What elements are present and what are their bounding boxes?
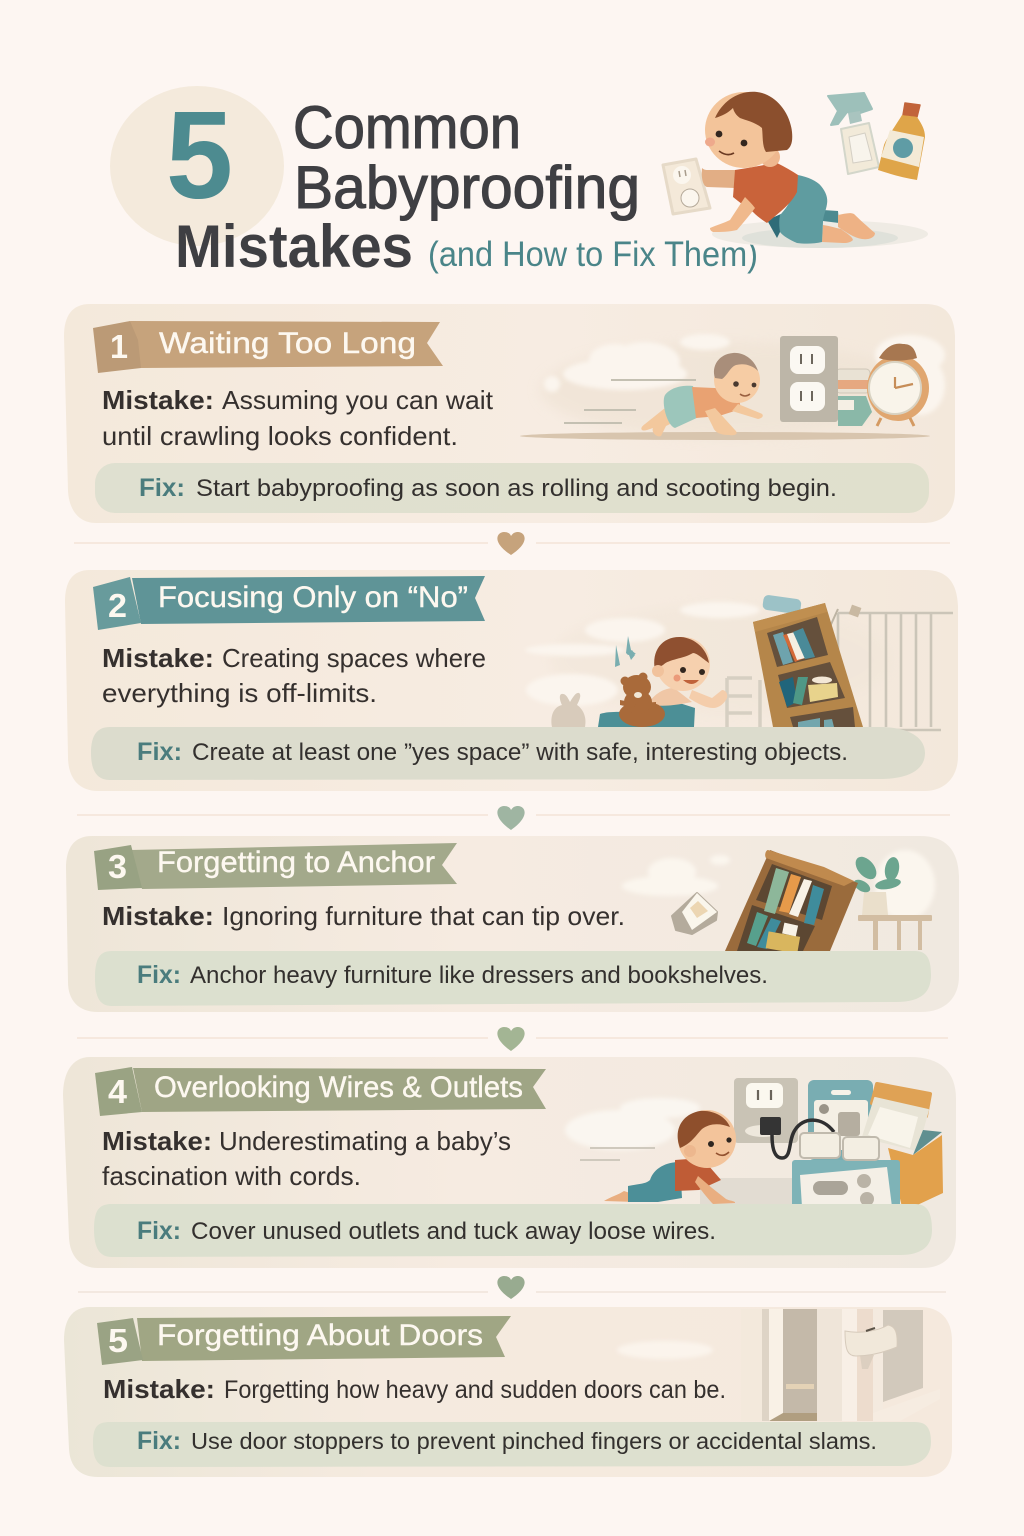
heading ribbon: 5 — [108, 1322, 128, 1359]
icon: wall outlet — [780, 336, 838, 422]
icon: plug with cord — [760, 1117, 834, 1158]
mistake text: Forgetting how heavy and sudden doors can be. — [224, 1376, 726, 1404]
icon: crawling baby — [604, 1110, 736, 1204]
fix bar: Fix: — [137, 1217, 181, 1245]
mistake text: Underestimating a baby’s — [219, 1126, 511, 1156]
title line: Mistakes: Mistakes — [175, 213, 413, 280]
heading ribbon — [93, 321, 443, 373]
icon: ladder rail — [727, 678, 760, 727]
icon: safety gate — [838, 613, 953, 730]
fix bar — [91, 727, 925, 780]
icon: spray bottle — [828, 93, 879, 174]
title line: Babyproofing: Babyproofing — [294, 154, 640, 221]
icon: baby — [598, 637, 727, 727]
header — [110, 86, 928, 280]
panel background — [64, 304, 955, 523]
fix bar: Anchor heavy furniture like dressers and bookshelves. — [190, 962, 768, 989]
icon: alarm clock — [867, 344, 929, 426]
panel 4 — [63, 1057, 956, 1268]
fix bar: Fix: — [139, 474, 185, 502]
fix bar: Use door stoppers to prevent pinched fingers or accidental slams. — [191, 1428, 877, 1454]
icon: orange bottle — [878, 103, 925, 180]
heading ribbon — [95, 1067, 546, 1116]
number tab — [97, 1318, 143, 1365]
icon: teddy bear — [619, 672, 665, 727]
fix bar: Create at least one ”yes space” with safe, interesting objects. — [192, 739, 848, 766]
illustration: baby, teddy, tipping bookshelf and gate — [525, 594, 953, 730]
icon: books — [836, 369, 872, 426]
mistake text: Ignoring furniture that can tip over. — [222, 901, 625, 931]
subtitle: (and How to Fix Them) — [428, 235, 758, 274]
mistake text — [102, 643, 486, 708]
icon: table — [858, 915, 932, 950]
heading text: Waiting Too Long — [159, 327, 416, 360]
icon: back cards — [808, 1080, 930, 1160]
divider with heart 1 — [74, 532, 950, 555]
heading ribbon — [93, 576, 485, 630]
mistake text: until crawling looks confident. — [102, 421, 458, 451]
icon: small covers — [800, 1133, 879, 1160]
mistake text: Creating spaces where — [222, 643, 486, 673]
heading ribbon: 3 — [108, 848, 127, 885]
mistake text — [102, 1126, 511, 1191]
icon: window pane — [883, 1310, 923, 1402]
icon: wall outlet — [734, 1078, 798, 1143]
panel background — [64, 1307, 952, 1477]
heading ribbon — [94, 843, 457, 890]
big number 5: 5 — [166, 87, 233, 225]
panel 2 — [65, 570, 958, 791]
panel 3 — [66, 836, 959, 1012]
fix bar — [94, 1204, 932, 1257]
fix bar: Start babyproofing as soon as rolling and scooting begin. — [196, 475, 837, 502]
heading ribbon: 4 — [108, 1073, 128, 1110]
fix bar: Fix: — [137, 738, 182, 766]
illustration: baby reaching for plug and cover box — [565, 1078, 943, 1207]
mistake text: everything is off-limits. — [102, 678, 377, 708]
icon: orange box — [888, 1130, 943, 1207]
heading text: Focusing Only on “No” — [158, 581, 468, 614]
heading ribbon: 2 — [108, 587, 127, 624]
icon: teal box — [792, 1160, 900, 1207]
fix bar: Fix: — [137, 961, 181, 989]
fix bar — [95, 951, 931, 1006]
fix bar — [93, 1422, 931, 1467]
icon: tipping bookshelf — [753, 603, 863, 727]
illustration: baby touching outlet with bottles — [663, 92, 928, 248]
fix bar: Fix: — [137, 1427, 181, 1455]
divider with heart 2 — [77, 806, 950, 830]
mistake text: fascination with cords. — [102, 1161, 361, 1191]
icon: baby — [702, 92, 875, 244]
illustration: baby crawling towards outlet and clock — [520, 334, 945, 440]
number badge circle — [110, 86, 284, 246]
mistake text: Mistake: — [102, 643, 214, 673]
heading text: Overlooking Wires & Outlets — [154, 1071, 523, 1104]
illustration: door with stopper — [617, 1309, 940, 1421]
icon: crawling baby — [641, 353, 763, 436]
icon: door stopper — [845, 1325, 897, 1369]
number tab — [93, 577, 141, 630]
mistake text: Assuming you can wait — [222, 385, 494, 415]
mistake text: Mistake: — [102, 1126, 212, 1156]
panel 1 — [64, 304, 955, 523]
panel 5 — [64, 1307, 952, 1477]
icon: outlet plate — [663, 159, 710, 214]
fix bar — [95, 463, 929, 513]
icon: tipping bookshelf — [725, 850, 858, 954]
fix bar: Cover unused outlets and tuck away loose wires. — [191, 1218, 716, 1245]
panel background — [65, 570, 958, 791]
panel background — [66, 836, 959, 1012]
icon: sparkles — [615, 636, 636, 667]
mistake text: Mistake: — [102, 385, 214, 415]
mistake text — [102, 385, 494, 451]
icon: bottle on shelf — [762, 594, 802, 615]
number tab — [93, 321, 141, 373]
icon: outlet cover — [672, 893, 717, 934]
number tab — [95, 1067, 142, 1116]
mistake text: Mistake: — [103, 1374, 215, 1404]
number tab — [94, 845, 142, 890]
panel background — [63, 1057, 956, 1268]
title line: Common: Common — [293, 94, 521, 161]
mistake text: Mistake: — [102, 901, 214, 931]
icon: door opening — [769, 1309, 817, 1421]
icon: plant — [852, 853, 902, 915]
divider with heart 4 — [78, 1276, 946, 1299]
heading ribbon — [97, 1316, 511, 1365]
icon: toy rabbit — [551, 693, 586, 727]
heading text: Forgetting to Anchor — [157, 846, 435, 879]
divider with heart 3 — [77, 1027, 948, 1051]
heading text: Forgetting About Doors — [157, 1319, 483, 1352]
heading ribbon: 1 — [110, 328, 128, 365]
illustration: tipping bookshelf, plant and table — [622, 850, 935, 954]
